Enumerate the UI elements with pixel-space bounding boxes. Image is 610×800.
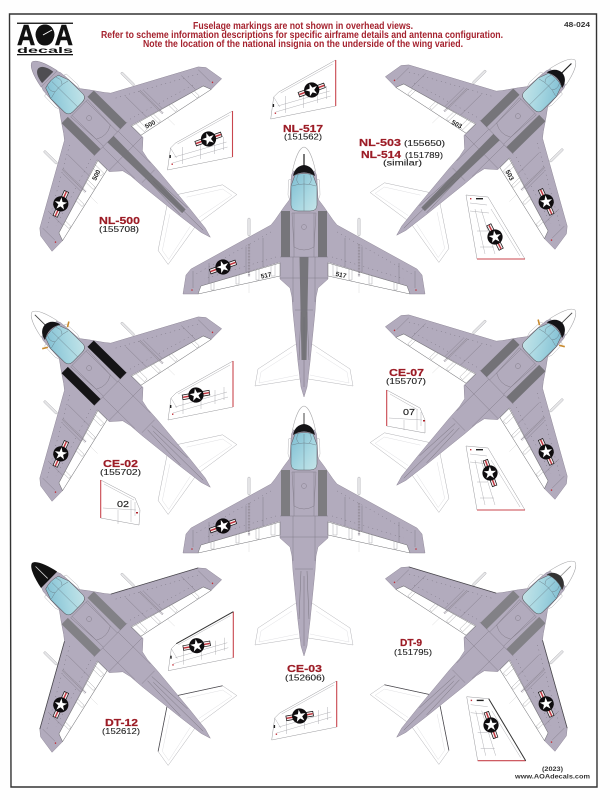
tail number: 500 upper flap: 500: [144, 119, 157, 131]
wing panel: CE-02: [168, 361, 233, 420]
label: CE-02: (155702): [100, 467, 141, 477]
label: DT-12: [102, 718, 140, 736]
tail panel: CE-02: 02: [117, 500, 130, 509]
tail number: 517 left: 517: [260, 271, 273, 281]
wing panel: CE-03: [272, 681, 337, 740]
label: DT-12: (152612): [102, 726, 140, 736]
heading: notes: Refer to scheme information descriptions for specific airframe details and antenna configuration.: [101, 30, 503, 41]
label: NL-517: [283, 124, 324, 142]
label: CE-02: CE-02: [103, 459, 139, 470]
logo: AOA decals: AOA: [17, 20, 73, 52]
credit: year and website: [514, 766, 590, 780]
label: NL-500: [99, 216, 141, 234]
label: NL-500: (155708): [99, 224, 139, 234]
aircraft: DT-9: [312, 476, 610, 800]
tail number: 503 lower flap: 503: [504, 169, 515, 182]
credit: year and website: www.AOAdecals.com: [514, 774, 590, 780]
label: NL-503 and NL-514: NL-503: [359, 138, 402, 149]
aircraft: CE-03: [183, 406, 425, 656]
heading: notes: [101, 21, 503, 50]
label: CE-07: (155707): [386, 376, 426, 386]
aircraft: DT-12: [0, 477, 295, 800]
label: NL-517: (151562): [284, 132, 322, 142]
wing panel: DT-9: [467, 697, 526, 761]
label: NL-503 and NL-514: (155650): [404, 138, 445, 148]
label: DT-9: [394, 638, 432, 657]
label: DT-12: DT-12: [105, 718, 139, 729]
label: NL-503 and NL-514: (similar): [383, 158, 422, 168]
label: NL-503 and NL-514: [359, 138, 445, 168]
aircraft: NL-517: [183, 147, 425, 397]
logo: AOA decals: decals: [17, 45, 74, 55]
credit: year and website: (2023): [542, 766, 563, 773]
label: DT-9: (151795): [394, 647, 432, 657]
label: NL-503 and NL-514: NL-514: [361, 150, 402, 161]
tail panel: CE-07: 07: [403, 408, 416, 417]
heading: notes: Note the location of the national insignia on the underside of the wing varied.: [143, 39, 463, 50]
aircraft: NL-500: [0, 0, 295, 324]
aircraft: NL-503: [312, 0, 610, 322]
label: CE-03: (152606): [285, 672, 325, 682]
label: CE-03: [285, 664, 325, 682]
label: CE-02: [100, 459, 141, 477]
tail number: 500 lower flap: 500: [91, 169, 103, 182]
label: CE-03: CE-03: [287, 664, 323, 675]
tail number: 517 right: 517: [335, 271, 347, 280]
tail panel: CE-02: [101, 480, 140, 525]
aircraft: CE-07: [312, 224, 610, 572]
wing panel: NL-503: [466, 195, 525, 259]
label: CE-07: [386, 368, 426, 386]
label: NL-500: NL-500: [99, 216, 141, 227]
sheet number: 48-024: [564, 20, 591, 29]
wing panel: NL-500: [168, 111, 232, 170]
aircraft: CE-02: [0, 226, 295, 574]
label: NL-517: NL-517: [283, 124, 324, 135]
heading: notes: Fuselage markings are not shown in overhead views.: [193, 21, 413, 32]
wing panel: CE-07: [466, 446, 525, 510]
wing panel: NL-517: [271, 60, 336, 119]
label: CE-07: CE-07: [389, 368, 425, 379]
label: DT-9: DT-9: [400, 638, 422, 649]
label: NL-503 and NL-514: (151789): [405, 150, 443, 160]
tail number: 503 upper flap: 503: [450, 119, 463, 131]
tail panel: CE-07: [387, 390, 425, 433]
wing panel: DT-12: [168, 612, 233, 671]
